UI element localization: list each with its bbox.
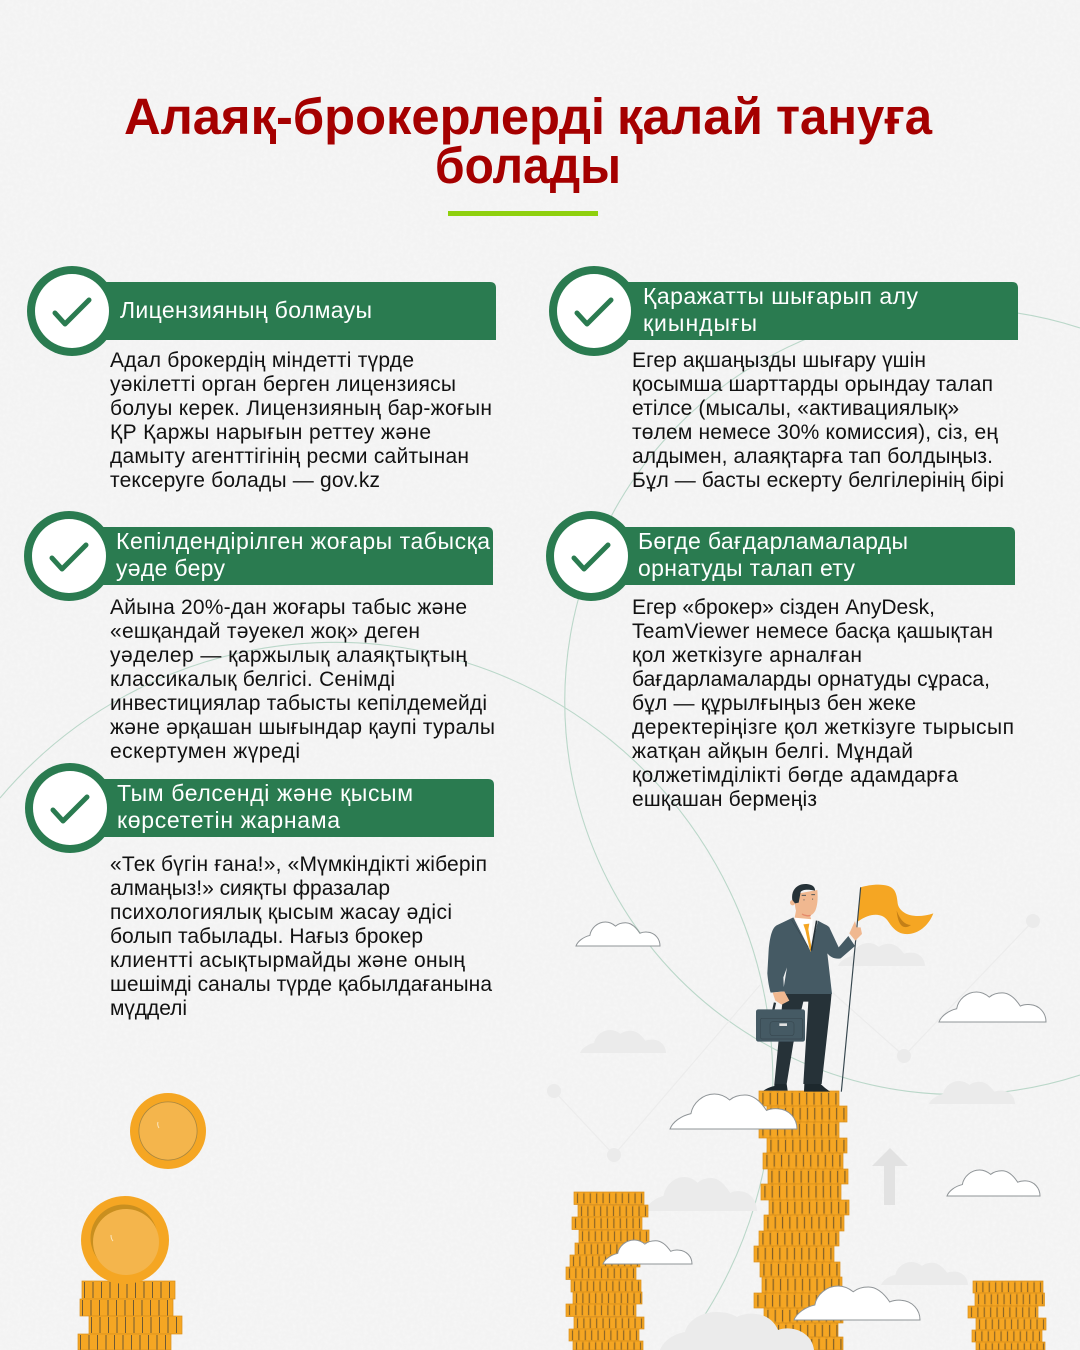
icon: large coin [81,1196,169,1284]
title: қалай [617,88,763,145]
panel: withdrawal difficulty [549,266,1018,492]
heading [117,780,413,833]
icon: small coin [130,1093,206,1169]
body text: «ешқандай тәуекел жоқ» деген [110,620,420,643]
heading [638,528,908,581]
icon: flag [858,885,933,934]
panel: guaranteed high income [24,511,495,763]
heading [643,283,918,336]
heading banner [100,282,496,340]
body text: шешімді саналы түрде қабылдағанына [110,973,492,996]
icon ring [24,511,114,601]
title: болады [435,137,621,194]
body text: қосымша шарттарды орындау талап [632,373,993,396]
body text: мүдделі [110,997,187,1020]
body text: Айына 20%-дан жоғары табыс және [110,596,467,619]
icon ring [25,763,115,853]
white clouds [576,922,1046,1320]
body text: тексеруге болады — gov.kz [110,469,380,492]
coin stack: right [968,1281,1046,1350]
body text: жатқан айқын белгі. Мұндай [632,740,913,763]
body text: деректеріңізге қол жеткізуге тырысып [632,716,1014,739]
body text: уәкілетті орган берген лицензиясы [110,373,456,396]
body text: ешқашан бермеңіз [632,788,817,811]
body text: инвестициялар табысты кепілдемейді [110,692,487,715]
coin stack: left small [566,1192,649,1350]
background network lines and dots [547,914,1040,1162]
icon ring [546,511,636,601]
heading banner [619,527,1015,585]
jacket [767,917,855,994]
icon: briefcase [756,1002,805,1042]
heading: уәде беру [116,555,226,581]
body text: клиентті асықтырмайды және оның [110,949,465,972]
body text: Егер ақшаңызды шығару үшін [632,349,926,372]
heading: Бөгде бағдарламаларды [638,528,908,554]
panel: third-party software [546,511,1015,811]
shirt and tie [792,918,817,952]
shoes [763,1084,830,1092]
body text: болып табылады. Нағыз брокер [110,925,423,948]
body text: уәделер — қаржылық алаяқтықтың [110,644,467,667]
icon ring [27,266,117,356]
neck and face [790,884,818,922]
heading [116,528,490,581]
illustration: businessman with flag [756,884,933,1092]
icon: check mark [33,771,107,845]
icon: check mark [35,274,109,348]
panel: no licence [27,266,496,492]
body text: қол жеткізуге арналған [632,644,862,667]
body text: Бұл — басты ескерту белгілерінің бірі [632,469,1004,492]
heading: Кепілдендірілген жоғары табысқа [116,528,490,554]
body text: болуы керек. Лицензияның бар-жоғын [110,397,492,420]
body text: бағдарламаларды орнатуды сұраса, [632,668,990,691]
heading: Лицензияның болмауы [120,297,372,323]
body text: «Тек бүгін ғана!», «Мүмкіндікті жіберіп [110,853,487,876]
heading: орнатуды талап ету [638,555,856,581]
icon: upward arrow [872,1148,908,1205]
body text: Адал брокердің міндетті түрде [110,349,414,372]
body text: классикалық белгісі. Сенімді [110,668,395,691]
flag pole [841,887,861,1092]
heading banner [622,282,1018,340]
thin decorative arcs [0,308,1080,1350]
heading: Қаражатты шығарып алу [643,283,918,309]
body text: психологиялық қысым жасау әдісі [110,901,452,924]
body text [110,349,492,492]
icon: check mark [32,519,106,593]
coin stack: bottom left [78,1281,182,1350]
body text [632,596,1014,811]
heading: қиындығы [643,310,757,336]
title [124,88,933,194]
body text [110,596,495,763]
body text [632,349,1004,492]
title underline [448,211,598,216]
grey background clouds [580,943,1015,1285]
body text [110,853,492,1020]
body text: қолжетімділікті бөгде адамдарға [632,764,958,787]
body text: ҚР Қаржы нарығын реттеу және [110,421,431,444]
body text: ескертумен жүреді [110,740,300,763]
heading: Тым белсенді және қысым [117,780,413,806]
coin stack: centre tall [754,1091,849,1350]
heading banner [97,527,493,585]
body text: алдымен, алаяқтарға тап болдыңыз. [632,445,993,468]
body text: Егер «брокер» сізден AnyDesk, [632,596,935,619]
title: Алаяқ-брокерлерді [124,88,605,145]
panel: aggressive advertising [25,763,494,1020]
body text: TeamViewer немесе басқа қашықтан [632,620,993,643]
body text: дамыту агенттігінің ресми сайтынан [110,445,469,468]
trousers [774,993,832,1084]
grey foreground cloud [660,1312,814,1350]
icon: check mark [554,519,628,593]
title: тануға [776,88,933,145]
icon: check mark [557,274,631,348]
body text: және әрқашан шығындар қаупі туралы [110,716,495,739]
heading: көрсететін жарнама [117,807,340,833]
body text: төлем немесе 30% комиссия), сіз, ең [632,421,998,444]
hands [773,921,862,1005]
body text: етілсе (мысалы, «активациялық» [632,397,959,420]
heading banner [98,779,494,837]
body text: алмаңыз!» сияқты фразалар [110,877,390,900]
body text: бұл — құрылғыңыз бен жеке [632,692,916,715]
icon ring [549,266,639,356]
